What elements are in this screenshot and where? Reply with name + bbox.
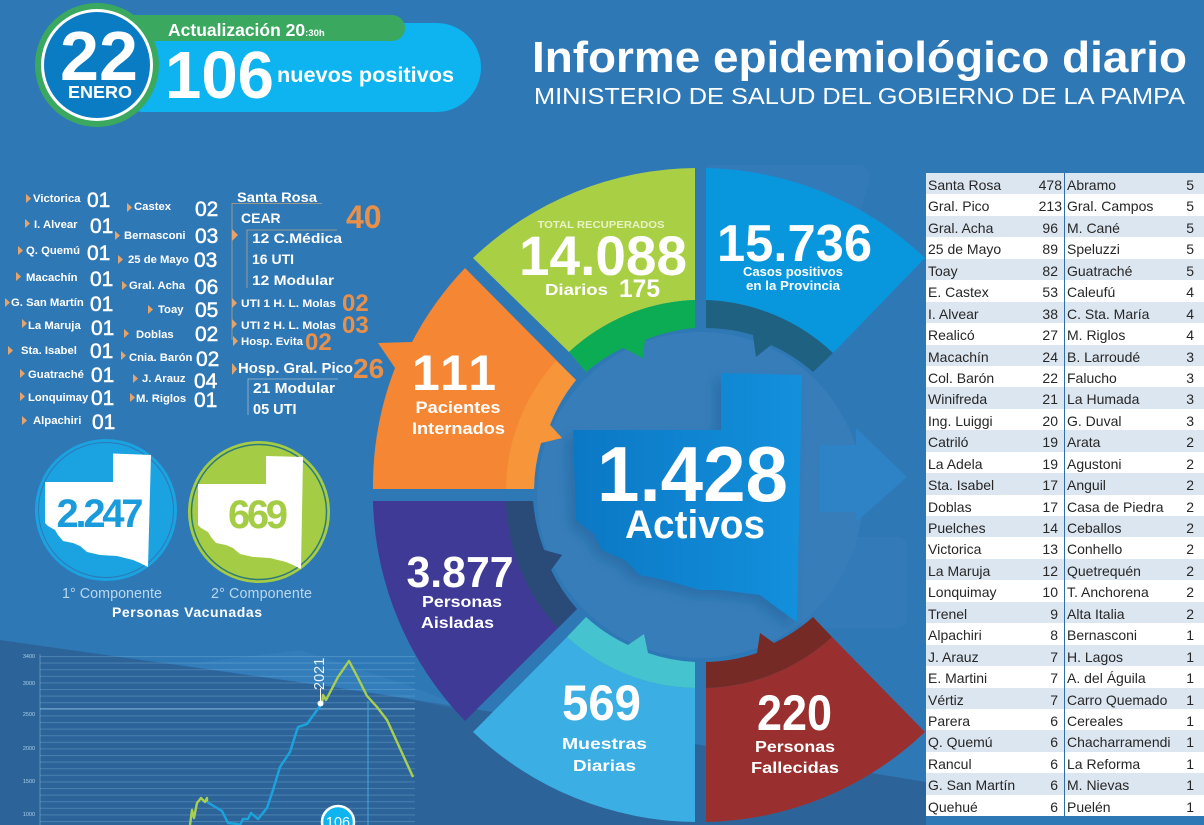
table: cases by town: Speluzzi [1067,241,1120,257]
list: cases by town, column 1: Lonquimay [28,392,89,404]
table: cases by town: 1 [1186,756,1194,772]
list: cases by town, column 2: Cnia. Barón [129,352,192,364]
table: cases by town: J. Arauz [928,649,979,665]
table: cases by town: 4 [1186,327,1194,343]
table: cases by town: E. Martini [928,670,987,686]
table: cases by town: 2 [1186,477,1194,493]
table: cases by town: 14 [1042,520,1058,536]
list: cases by town, column 2: 01 [194,389,217,412]
ring segment: total recovered: 175 [619,275,660,303]
table: cases by town: Quetrequén [1067,563,1141,579]
list: cases by town, column 2: 06 [195,276,218,299]
table: cases by town: Conhello [1067,541,1122,557]
list: Hospital Gral. Pico: Hosp. Gral. Pico [238,361,353,377]
list: cases by town, column 2: 05 [195,299,218,322]
table: cases by town: La Maruja [928,563,990,579]
table: cases by town: 1 [1186,670,1194,686]
table: cases by town: 6 [1050,756,1058,772]
chart axis labels: 1000 [23,812,35,818]
table: cases by town: 22 [1042,370,1058,386]
table: cases by town: Rancul [928,756,972,772]
list: cases by town, column 1: 01 [87,189,110,212]
table: cases by town: Parera [928,713,970,729]
marker: 106 new cases [322,806,354,825]
list: cases by town, column 2: Bernasconi [124,230,186,242]
table: cases by town: Alpachiri [928,627,982,643]
table: cases by town [926,173,1204,816]
chart axis labels: 3400 [23,654,35,660]
table: cases by town: M. Cané [1067,220,1120,236]
table: cases by town: 4 [1186,306,1194,322]
ring segment: deceased people: Fallecidas [751,760,839,777]
table: cases by town: Carro Quemado [1067,692,1167,708]
table: cases by town: Guatraché [1067,263,1132,279]
table: cases by town: B. Larroudé [1067,348,1140,364]
list: cases by town, column 2: Toay [158,304,184,316]
table: cases by town: 2 [1186,584,1194,600]
ring segment: total recovered: Diarios [545,282,608,299]
table: cases by town: Gral. Campos [1067,198,1153,214]
list: cases by town, column 2: 04 [194,370,218,393]
list: cases by town, column 1: 01 [91,387,114,410]
list: cases by town, column 1: 01 [91,317,114,340]
list: Santa Rosa hospitals: 02 [305,329,332,356]
ring segment: province positive cases: en la Provincia [746,279,841,293]
table: cases by town: 1 [1186,649,1194,665]
table: cases by town: 1 [1186,734,1194,750]
marker: 2021 [312,658,328,706]
table: cases by town: 8 [1050,627,1058,643]
list: cases by town, column 1: 01 [92,411,115,434]
date circle: 22 [60,17,138,95]
table: cases by town: Col. Barón [928,370,994,386]
table: cases by town: 24 [1042,348,1058,364]
table: cases by town: 2 [1186,541,1194,557]
header badge: date and new positives [35,3,481,127]
vaccine badge: first component [35,439,177,602]
list: Hospital Gral. Pico: 05 UTI [253,402,297,418]
ring segment: isolated people: Personas [422,594,502,611]
update time text: Actualización 20:30h [168,20,325,40]
table: cases by town: 25 de Mayo [928,241,1001,257]
table: cases by town: Santa Rosa [928,177,1001,193]
list: Santa Rosa hospitals: Hosp. Evita [241,336,304,348]
table: cases by town: E. Castex [928,284,989,300]
table: cases by town: Casa de Piedra [1067,499,1164,515]
list: cases by town, column 2: 25 de Mayo [128,254,189,266]
table: cases by town: 3 [1186,348,1194,364]
table: cases by town: 17 [1042,499,1058,515]
table: cases by town: 1 [1186,627,1194,643]
list: cases by town, column 1: Macachín [26,272,78,284]
table: cases by town: 5 [1186,198,1194,214]
table: cases by town: 6 [1050,799,1058,815]
ring segment: isolated people [373,501,577,721]
list: cases by town, column 1 [5,189,115,434]
list: Santa Rosa hospitals: 16 UTI [252,251,294,267]
ring segment: hospitalized patients: Pacientes [416,399,500,417]
table: cases by town: 19 [1042,456,1058,472]
table: cases by town: 478 [1039,177,1062,193]
table: cases by town: Catriló [928,434,968,450]
ring segment: daily samples: Muestras [562,736,647,753]
list: Santa Rosa hospitals: 02 [342,290,369,317]
table: cases by town: Doblas [928,499,972,515]
list: cases by town, column 2: 02 [196,348,219,371]
table: cases by town: T. Anchorena [1067,584,1149,600]
table: cases by town: Macachín [928,348,989,364]
table: cases by town: 2 [1186,499,1194,515]
active cases count: 1.428 [597,430,788,518]
table: cases by town: 10 [1042,584,1058,600]
table: cases by town: Realicó [928,327,975,343]
table: cases by town: 7 [1050,649,1058,665]
table: cases by town: Bernasconi [1067,627,1137,643]
table: cases by town: Chacharramendi [1067,734,1170,750]
ring segment: province positive cases: 15.736 [717,215,872,273]
table: cases by town: G. San Martín [928,777,1015,793]
table: cases by town: 17 [1042,477,1058,493]
new positives label: nuevos positivos [277,62,454,87]
table: cases by town: H. Lagos [1067,649,1123,665]
vaccinated people caption: Personas Vacunadas [112,604,262,620]
table: cases by town: 5 [1186,241,1194,257]
pill: new positives [100,23,481,112]
table: cases by town: Falucho [1067,370,1117,386]
subtitle: MINISTERIO DE SALUD DEL GOBIERNO DE LA PAMPA [534,83,1185,109]
vaccine badge: first component: 2.247 [56,492,144,536]
table: cases by town: 96 [1042,220,1058,236]
table: cases by town: 213 [1039,198,1062,214]
table: cases by town: 6 [1050,713,1058,729]
list: cases by town, column 1: Victorica [33,193,81,205]
table: cases by town: Lonquimay [928,584,996,600]
list: Santa Rosa hospitals [232,190,382,356]
table: cases by town: 3 [1186,370,1194,386]
table: cases by town: La Reforma [1067,756,1140,772]
table: cases by town: 2 [1186,520,1194,536]
list: Santa Rosa hospitals: 03 [342,312,369,339]
list: cases by town, column 2: Gral. Acha [129,280,186,292]
table: cases by town: 5 [1186,220,1194,236]
table: cases by town: C. Sta. María [1067,306,1149,322]
ring segment: daily samples: 569 [562,675,641,731]
ring segment: daily samples: Diarias [573,758,636,775]
list: cases by town, column 1: Guatraché [28,369,84,381]
table: cases by town: 6 [1050,777,1058,793]
table: cases by town: Ceballos [1067,520,1121,536]
vaccine badge: second component [188,441,330,602]
date circle [35,3,159,127]
table: cases by town: Trenel [928,606,967,622]
table: cases by town: 19 [1042,434,1058,450]
list: Hospital Gral. Pico: 26 [353,353,384,384]
chart axis labels: 3000 [23,681,35,687]
bar: update time [110,15,405,41]
table: cases by town: M. Riglos [1067,327,1125,343]
ring segment: daily samples [473,617,695,822]
chart axis labels: 2000 [23,746,35,752]
list: Santa Rosa hospitals: 12 Modular [252,272,335,288]
table: cases by town: 5 [1186,177,1194,193]
table: cases by town: 38 [1042,306,1058,322]
table: cases by town: 27 [1042,327,1058,343]
table: cases by town: Alta Italia [1067,606,1125,622]
list: cases by town, column 2 [115,198,219,412]
list: cases by town, column 2: 03 [195,225,218,248]
ring segment: province positive cases: Casos positivos [743,265,843,279]
table: cases by town: 89 [1042,241,1058,257]
list: Santa Rosa hospitals: CEAR [241,210,281,226]
table: cases by town: 4 [1186,284,1194,300]
list: cases by town, column 1: I. Alvear [34,219,78,231]
ring segment: isolated people: Aisladas [421,615,494,632]
new positives count: 106 [165,38,274,113]
list: cases by town, column 1: 01 [90,293,113,316]
table: cases by town: Ing. Luiggi [928,413,993,429]
table: cases by town: 1 [1186,799,1194,815]
table: cases by town: Anguil [1067,477,1106,493]
table: cases by town: Toay [928,263,958,279]
list: Santa Rosa hospitals: Santa Rosa [237,190,318,205]
list: cases by town, column 1: Sta. Isabel [21,345,77,357]
table: cases by town: Sta. Isabel [928,477,994,493]
list: cases by town, column 1: 01 [90,268,113,291]
vaccine badge: first component: 1° Componente [62,586,162,602]
table: cases by town: 2 [1186,434,1194,450]
chart lines [190,661,413,825]
date circle: ENERO [68,82,132,102]
table: cases by town: 21 [1042,391,1058,407]
table: cases by town: A. del Águila [1067,670,1146,686]
background arrow [820,428,907,522]
table: cases by town: La Humada [1067,391,1139,407]
ring segment: province positive cases [706,168,925,372]
chart axis labels: 1500 [23,779,35,785]
table: cases by town: 12 [1042,563,1058,579]
ring segment: deceased people: 220 [757,685,832,741]
list: Santa Rosa hospitals: 40 [346,199,382,235]
vaccine badge: second component: 2° Componente [211,586,312,602]
table: cases by town: 1 [1186,777,1194,793]
list: cases by town, column 1: Q. Quemú [26,245,80,257]
table: cases by town: Victorica [928,541,981,557]
table: cases by town: Gral. Acha [928,220,993,236]
table: cases by town: Gral. Pico [928,198,989,214]
list: Santa Rosa hospitals: UTI 1 H. L. Molas [241,298,336,310]
table: cases by town: 6 [1050,734,1058,750]
list: cases by town, column 2: Doblas [136,329,174,341]
table: cases by town: 2 [1186,563,1194,579]
ring segment: deceased people [706,617,925,822]
list: Hospital Gral. Pico [232,353,384,418]
table: cases by town: Cereales [1067,713,1123,729]
ring segment: hospitalized patients: Internados [412,420,505,438]
list: cases by town, column 1: 01 [90,340,113,363]
table: cases by town: 5 [1186,263,1194,279]
table: cases by town: Agustoni [1067,456,1121,472]
table: cases by town: 1 [1186,713,1194,729]
ring segment: total recovered [473,168,695,372]
vaccine badge: second component: 669 [228,493,288,537]
table: cases by town: G. Duval [1067,413,1121,429]
table: cases by town: La Adela [928,456,982,472]
table: cases by town: 3 [1186,413,1194,429]
list: cases by town, column 1: 01 [91,364,114,387]
ring segment: isolated people: 3.877 [406,548,514,597]
list: cases by town, column 1: 01 [90,215,113,238]
table: cases by town: Abramo [1067,177,1116,193]
chart: daily evolution [23,654,415,825]
table: cases by town: Winifreda [928,391,987,407]
list: cases by town, column 2: Castex [134,201,172,213]
table: cases by town: Q. Quemú [928,734,993,750]
table: cases by town: 1 [1186,692,1194,708]
list: cases by town, column 1: Alpachiri [33,415,81,427]
list: Santa Rosa hospitals: UTI 2 H. L. Molas [241,320,336,332]
table: cases by town: 9 [1050,606,1058,622]
marker: 2021: 2021 [312,658,328,690]
active cases label: Activos [625,503,765,547]
ring segment: total recovered: 14.088 [519,224,687,287]
ring segment: hospitalized patients [373,268,576,489]
table: cases by town: 82 [1042,263,1058,279]
table: cases by town: 13 [1042,541,1058,557]
list: cases by town, column 2: 02 [195,198,218,221]
list: cases by town, column 2: 03 [194,249,217,272]
table: cases by town: 3 [1186,391,1194,407]
list: cases by town, column 2: M. Riglos [136,393,186,405]
list: cases by town, column 1: G. San Martín [11,297,84,309]
table: cases by town: 2 [1186,606,1194,622]
active cases map [567,373,802,628]
table: cases by town: 20 [1042,413,1058,429]
center disc [537,332,863,658]
list: Santa Rosa hospitals: 12 C.Médica [252,230,342,246]
table: cases by town: 7 [1050,692,1058,708]
list: cases by town, column 1: 01 [87,242,110,265]
table: cases by town: Puelén [1067,799,1111,815]
chart axis labels: 2500 [23,712,35,718]
ring segment: total recovered: TOTAL RECUPERADOS [538,219,664,231]
table: cases by town: Caleufú [1067,284,1115,300]
title: Informe epidemiológico diario [532,33,1187,82]
table: cases by town: M. Nievas [1067,777,1129,793]
table: cases by town: Puelches [928,520,986,536]
table: cases by town: I. Alvear [928,306,979,322]
table: cases by town: Vértiz [928,692,964,708]
chart axis labels [23,654,35,818]
table: cases by town: 53 [1042,284,1058,300]
table: cases by town: 7 [1050,670,1058,686]
list: cases by town, column 2: 02 [195,323,218,346]
table: cases by town: Quehué [928,799,978,815]
table: cases by town: Arata [1067,434,1100,450]
list: cases by town, column 2: J. Arauz [142,373,186,385]
table: cases by town: 2 [1186,456,1194,472]
ring segment: hospitalized patients: 111 [412,345,496,401]
list: cases by town, column 1: La Maruja [28,320,81,332]
ring segment: deceased people: Personas [755,739,835,756]
list: Hospital Gral. Pico: 21 Modular [253,381,335,397]
